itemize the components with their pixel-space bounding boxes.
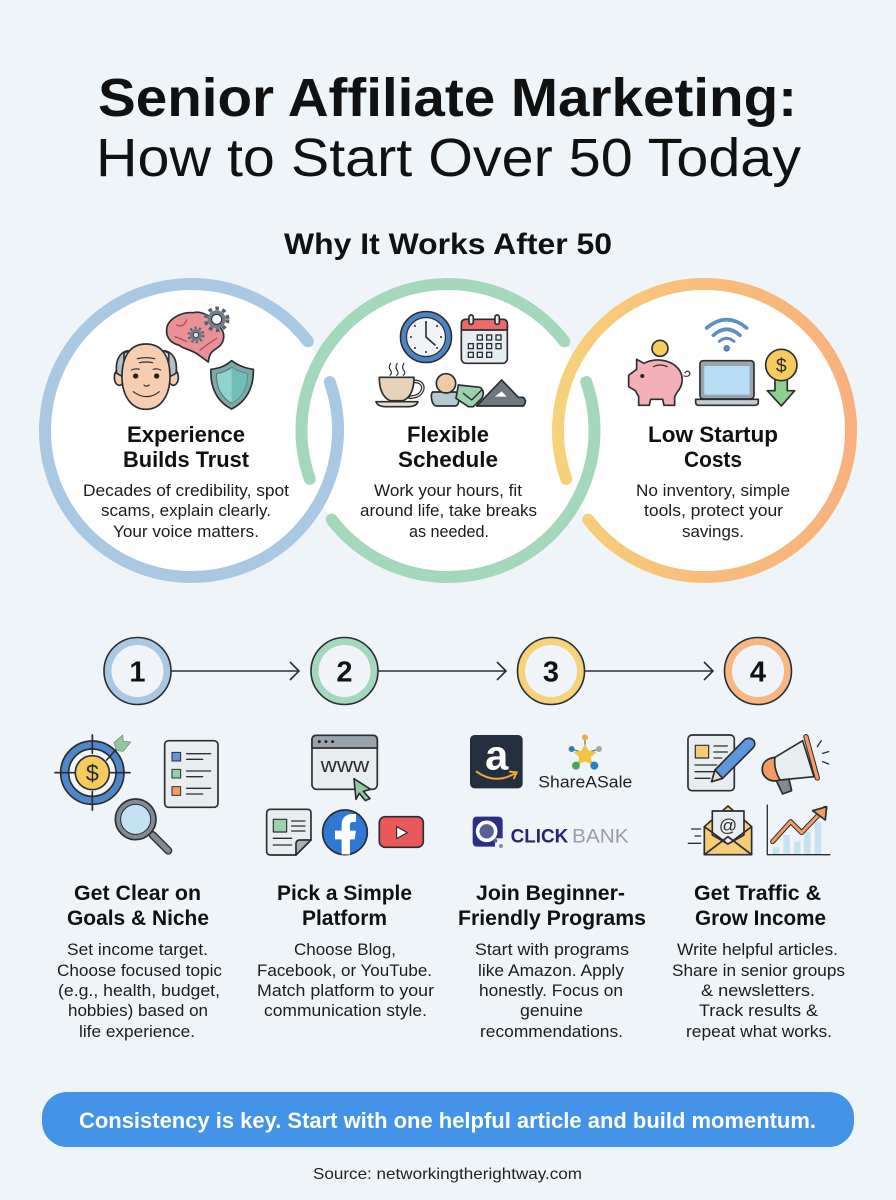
description: scams, explain clearly.	[101, 501, 271, 520]
icon: magnifying glass	[115, 799, 168, 851]
step badge 3	[518, 638, 584, 704]
description: honestly. Focus on	[479, 981, 623, 1000]
heading: Experience	[127, 422, 245, 447]
arrow: step 2 to 3	[378, 662, 506, 680]
description: life experience.	[79, 1022, 195, 1041]
heading	[458, 881, 646, 930]
step badge 1	[104, 638, 171, 704]
icon: clickbank logo	[473, 817, 629, 848]
section heading: why it works: Why It Works After 50	[284, 228, 612, 261]
description	[360, 481, 537, 541]
description: (e.g., health, budget,	[58, 981, 220, 1000]
description: Share in senior groups	[672, 961, 845, 980]
heading	[694, 881, 826, 930]
ring: yellow to orange	[558, 284, 851, 577]
source note: Source: networkingtherightway.com	[313, 1166, 582, 1183]
heading	[123, 422, 249, 472]
description: Work your hours, fit	[374, 481, 522, 500]
icon: growth chart	[767, 805, 830, 855]
description: & newsletters.	[701, 981, 815, 1000]
description: Decades of credibility, spot	[83, 481, 289, 500]
description	[57, 940, 222, 1041]
description	[636, 481, 790, 541]
icon: wifi	[707, 320, 747, 351]
icon: shareasale logo: ShareASale	[538, 773, 632, 792]
heading: Costs	[684, 447, 742, 472]
description: tools, protect your	[644, 501, 783, 520]
icon: senior face	[114, 344, 178, 409]
step badge 2: 2	[336, 656, 353, 688]
callout banner	[42, 1092, 854, 1147]
description	[672, 940, 845, 1041]
description	[475, 940, 629, 1041]
panel: step 2 simple platform	[257, 735, 434, 1020]
icon: dollar coin with down arrow: $	[776, 356, 787, 377]
icon: article and pen	[688, 735, 755, 791]
description: Facebook, or YouTube.	[257, 961, 432, 980]
description	[257, 940, 434, 1020]
description: repeat what works.	[686, 1022, 832, 1041]
description: around life, take breaks	[360, 501, 537, 520]
heading	[398, 422, 498, 472]
step badge 4	[724, 638, 792, 704]
icon: brain with gears	[167, 308, 228, 362]
icon: amazon logo	[470, 731, 523, 788]
heading: Builds Trust	[123, 447, 249, 472]
description: like Amazon. Apply	[478, 961, 624, 980]
title	[96, 68, 801, 188]
icon: laptop	[696, 361, 758, 405]
description: hobbies) based on	[68, 1001, 208, 1020]
icon: email envelope: @	[719, 816, 737, 836]
description: Match platform to your	[257, 981, 434, 1000]
description: No inventory, simple	[636, 481, 790, 500]
icon: document	[267, 809, 311, 855]
description: Write helpful articles.	[677, 940, 838, 959]
icon: dollar coin with down arrow	[766, 349, 797, 406]
icon: piggy bank and coin	[629, 340, 690, 405]
icon: target with dollar: $	[86, 760, 99, 786]
panel: low startup costs	[558, 284, 851, 577]
heading: Get Clear on	[74, 881, 201, 905]
description: Choose focused topic	[57, 961, 222, 980]
heading: Join Beginner-	[476, 881, 625, 905]
heading: Goals & Niche	[67, 906, 209, 930]
step badge 3: 3	[543, 656, 559, 688]
heading: Grow Income	[695, 906, 826, 930]
icon: calendar	[461, 315, 507, 363]
ring: blue	[45, 284, 338, 577]
icon: coffee cup	[376, 363, 423, 407]
circle white backgrounds	[46, 284, 850, 576]
heading: Flexible	[407, 422, 489, 447]
panel: flexible schedule	[301, 284, 595, 577]
title: How to Start Over 50 Today	[96, 128, 801, 188]
description: Set income target.	[67, 940, 208, 959]
description	[83, 481, 289, 541]
icon: youtube	[379, 817, 423, 847]
description: communication style.	[264, 1001, 427, 1020]
panel: step 4 traffic and income	[672, 735, 845, 1041]
arrow: step 1 to 2	[171, 662, 299, 680]
step badge 4: 4	[750, 656, 766, 688]
description: Start with programs	[475, 940, 629, 959]
description: recommendations.	[480, 1022, 623, 1041]
icon: clickbank logo: BANK	[572, 827, 629, 848]
arrow: step 3 to 4	[585, 662, 713, 680]
panel: step 1 goals and niche	[55, 735, 222, 1041]
icon: megaphone	[762, 737, 829, 794]
icon: clickbank logo: CLICK	[511, 827, 568, 848]
panel: experience builds trust	[45, 284, 338, 577]
description: genuine	[520, 1001, 583, 1020]
heading	[277, 881, 412, 930]
heading	[648, 422, 778, 472]
heading: Pick a Simple	[277, 881, 412, 905]
icon: browser window: www	[320, 754, 369, 777]
icon: amazon logo: a	[485, 731, 509, 778]
step badge 1: 1	[129, 656, 146, 688]
heading: Platform	[302, 906, 387, 930]
description: savings.	[682, 522, 744, 541]
title: Senior Affiliate Marketing:	[98, 68, 797, 128]
heading: Get Traffic &	[694, 881, 821, 905]
heading	[67, 881, 209, 930]
description: Track results &	[699, 1001, 819, 1020]
icon: clock	[400, 312, 452, 362]
icon: target with dollar	[55, 735, 131, 810]
icon: facebook	[323, 810, 367, 855]
heading: Schedule	[398, 447, 498, 472]
icon: email envelope	[688, 806, 752, 855]
step badge 2	[311, 638, 378, 704]
panel: step 3 beginner programs	[458, 731, 646, 1041]
icon: shield	[211, 361, 253, 409]
icon: browser window	[312, 735, 377, 801]
icon: shareasale logo	[538, 734, 632, 792]
callout banner: Consistency is key. Start with one helpful article and build momentum.	[79, 1108, 816, 1133]
heading: Friendly Programs	[458, 906, 646, 930]
ring: green	[301, 284, 595, 577]
icon: person resting	[431, 374, 525, 407]
description: Choose Blog,	[294, 940, 396, 959]
description: Your voice matters.	[113, 522, 259, 541]
icon: checklist	[165, 741, 218, 807]
description: as needed.	[409, 522, 489, 541]
heading: Low Startup	[648, 422, 778, 447]
